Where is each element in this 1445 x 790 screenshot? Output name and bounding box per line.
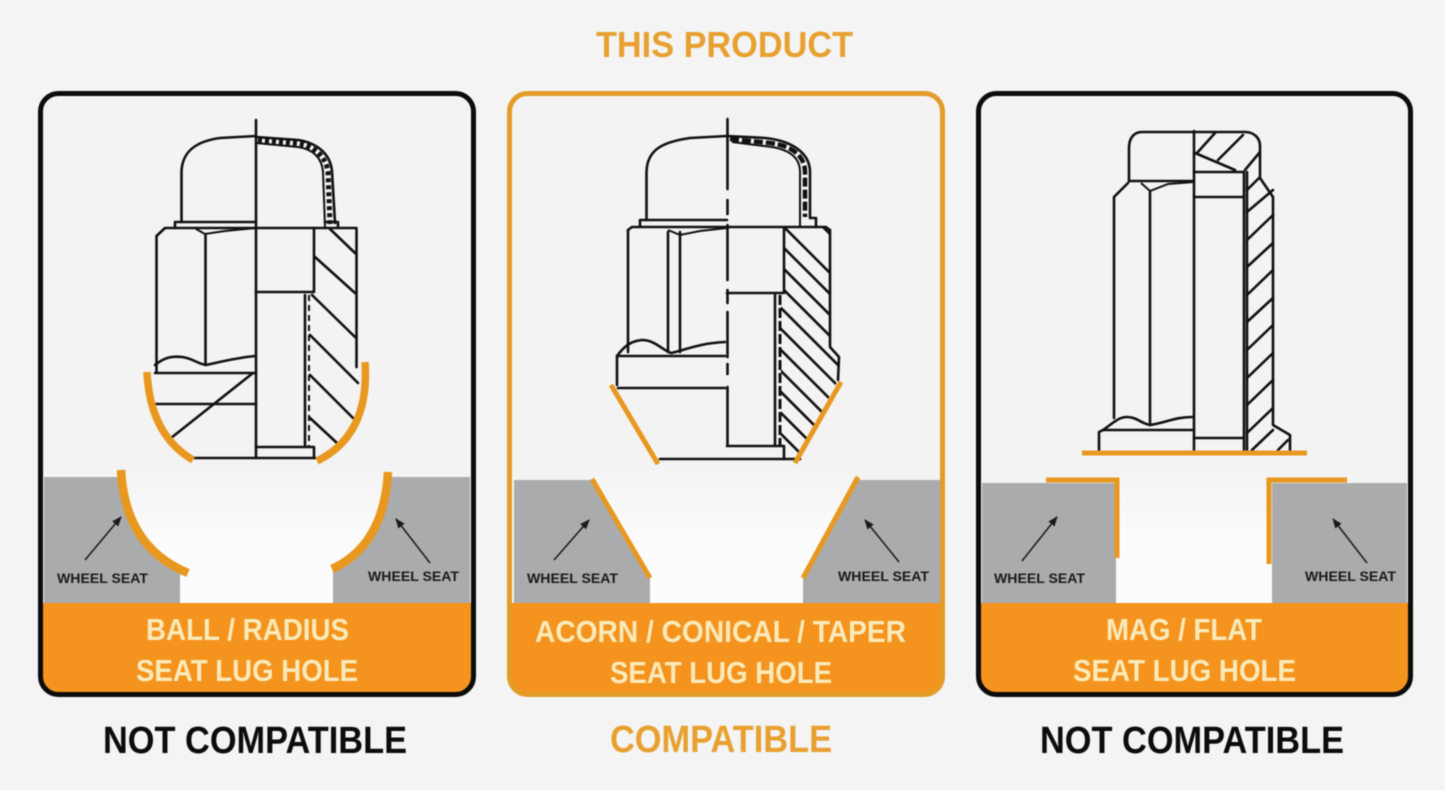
orange seat arcs in hole: ball (121, 470, 388, 573)
orange seat lines in hole: acorn (592, 477, 858, 578)
band: mag (981, 603, 1408, 693)
band text: mag (1073, 612, 1296, 688)
lug nut drawing: ball seat (155, 120, 358, 458)
label: wheel seat left: WHEEL SEAT (994, 570, 1085, 586)
arrow: left wheel seat (1022, 517, 1057, 561)
panel: mag / flat seat (978, 94, 1410, 694)
band text: mag: SEAT LUG HOLE (1073, 653, 1296, 688)
orange seat arcs on nut: ball (147, 362, 365, 461)
panel: acorn / conical / taper seat (510, 94, 942, 694)
arrow: left wheel seat (554, 520, 589, 560)
band: acorn (512, 603, 940, 693)
status: not compatible left: NOT COMPATIBLE (103, 720, 407, 762)
wheel seat cutaway: acorn (514, 470, 940, 604)
wheel seat cutaway: ball (44, 470, 470, 604)
arrow: right wheel seat (865, 520, 899, 562)
status: not compatible right: NOT COMPATIBLE (1040, 720, 1344, 762)
panel border: acorn (510, 94, 942, 694)
panel border: ball (40, 94, 474, 694)
band text: acorn (535, 614, 906, 690)
title: this product: THIS PRODUCT (596, 24, 853, 65)
status: compatible: COMPATIBLE (610, 719, 832, 761)
orange seat line on nut: mag (1082, 450, 1307, 456)
label: wheel seat left: WHEEL SEAT (527, 570, 618, 586)
panel border: mag (978, 94, 1410, 694)
wheel seat cutaway: mag (982, 470, 1407, 604)
panel: ball / radius seat (40, 94, 474, 694)
arrow: right wheel seat (1333, 519, 1367, 563)
arrow: left wheel seat (85, 517, 121, 560)
band: ball radius (43, 603, 471, 693)
band text: acorn: ACORN / CONICAL / TAPER (535, 614, 906, 649)
band text: ball radius: BALL / RADIUS (146, 612, 349, 647)
orange seat lines on nut: acorn (611, 382, 841, 464)
band text: ball radius: SEAT LUG HOLE (136, 653, 358, 688)
band text: acorn: SEAT LUG HOLE (610, 655, 832, 690)
lug nut drawing: mag seat (1099, 131, 1290, 450)
label: wheel seat right: WHEEL SEAT (368, 568, 459, 584)
orange seat corners in hole: mag (1046, 480, 1347, 564)
label: wheel seat left: WHEEL SEAT (57, 570, 148, 586)
band text: ball radius (136, 612, 358, 688)
label: wheel seat right: WHEEL SEAT (1305, 568, 1396, 584)
label: wheel seat right: WHEEL SEAT (838, 568, 929, 584)
arrow: right wheel seat (396, 519, 430, 563)
band text: mag: MAG / FLAT (1106, 612, 1262, 647)
lug nut drawing: acorn seat (614, 117, 842, 462)
